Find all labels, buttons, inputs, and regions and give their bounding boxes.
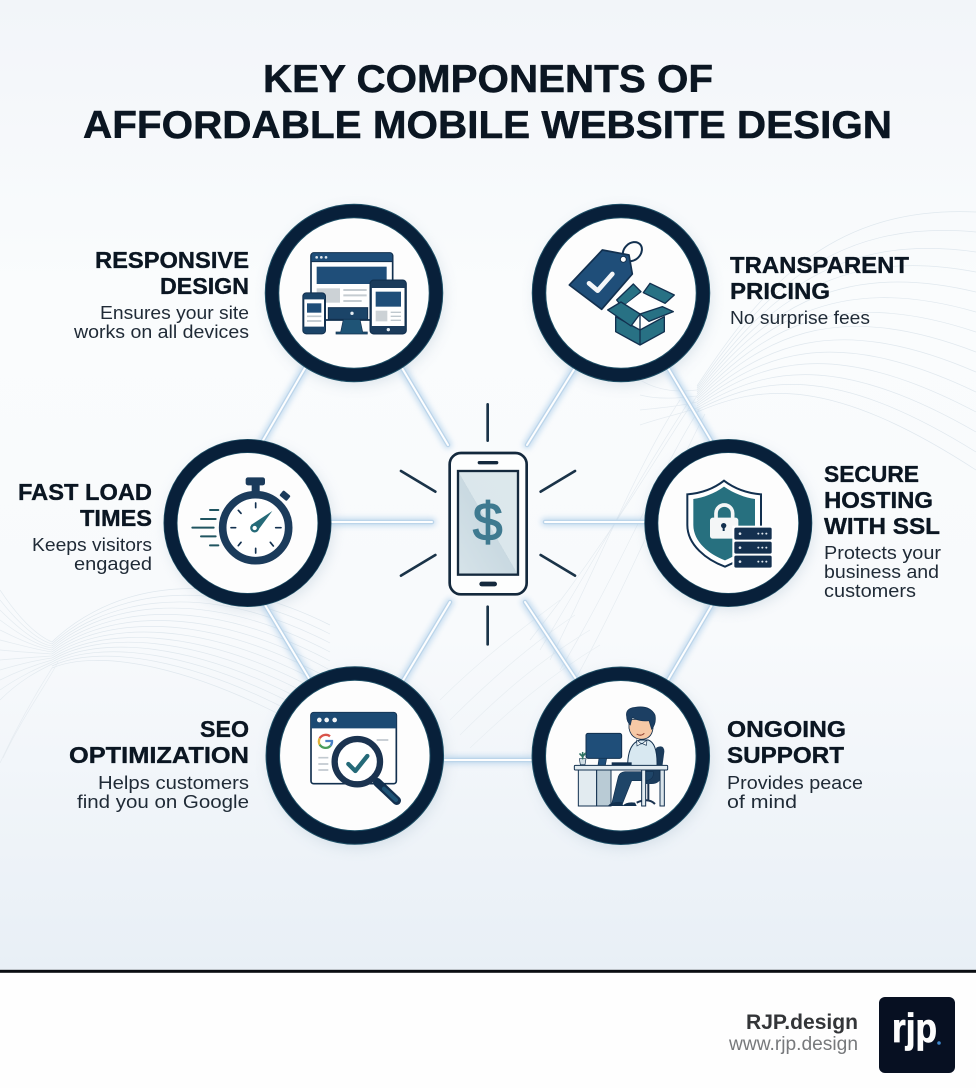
ring <box>539 674 703 838</box>
panel: transparent pricing <box>539 211 910 375</box>
text: transparent pricing <box>730 252 910 328</box>
panel: ongoing support <box>539 674 863 838</box>
text: responsive design: works on all devices <box>73 322 249 342</box>
text: secure hosting with ssl: SECURE <box>824 461 919 487</box>
text: transparent pricing: No surprise fees <box>730 308 870 328</box>
text: seo optimization: SEO <box>200 716 249 742</box>
text: fast load times: TIMES <box>80 505 152 531</box>
logo <box>879 997 955 1073</box>
text: responsive design: Ensures your site <box>100 303 249 323</box>
dollar sign: $ <box>473 494 503 553</box>
ring <box>272 211 436 375</box>
panel: responsive design <box>73 211 436 375</box>
icon: price tag and box <box>569 238 674 345</box>
panel: fast load times <box>18 446 324 600</box>
text: fast load times: Keeps visitors <box>32 535 152 555</box>
text: seo optimization: Helps customers <box>98 773 249 793</box>
title <box>83 58 892 147</box>
brand url: www.rjp.design <box>728 1034 858 1055</box>
panel: secure hosting with ssl <box>651 446 941 601</box>
text: ongoing support: SUPPORT <box>727 742 845 768</box>
text: transparent pricing: TRANSPARENT <box>730 252 910 278</box>
footer bar <box>0 970 976 1088</box>
icon: person at desk <box>574 707 668 806</box>
ring <box>273 674 437 838</box>
logo: rjp <box>892 1005 937 1051</box>
text: secure hosting with ssl <box>824 461 941 601</box>
icon: stopwatch <box>192 477 291 561</box>
text: seo optimization <box>69 716 249 812</box>
text: secure hosting with ssl: customers <box>824 581 916 601</box>
text: secure hosting with ssl: business and <box>824 562 939 582</box>
text: fast load times: FAST LOAD <box>18 479 152 505</box>
phone body <box>450 453 527 594</box>
text: secure hosting with ssl: WITH SSL <box>824 513 940 539</box>
connector network <box>262 368 712 760</box>
text: fast load times: engaged <box>74 554 152 574</box>
ring shadows <box>167 209 813 848</box>
text: secure hosting with ssl: Protects your <box>824 543 941 563</box>
icon: browser and magnifier <box>311 713 397 801</box>
text: responsive design: DESIGN <box>160 273 249 299</box>
brand name: RJP.design <box>746 1010 858 1034</box>
ring <box>170 446 324 600</box>
text: responsive design <box>73 247 249 342</box>
panel: seo optimization <box>69 674 437 838</box>
phone rays <box>401 404 575 644</box>
title: AFFORDABLE MOBILE WEBSITE DESIGN <box>83 104 892 147</box>
title: KEY COMPONENTS OF <box>263 58 713 101</box>
icon: shield, lock and server <box>687 481 773 569</box>
central phone icon <box>401 404 575 644</box>
text: responsive design: RESPONSIVE <box>95 247 249 273</box>
ring <box>651 446 805 600</box>
text: ongoing support: of mind <box>727 792 797 812</box>
text: ongoing support: ONGOING <box>727 716 846 742</box>
text: ongoing support: Provides peace <box>727 773 863 793</box>
text: transparent pricing: PRICING <box>730 278 830 304</box>
text: ongoing support <box>727 716 863 812</box>
text: fast load times <box>18 479 152 574</box>
text: secure hosting with ssl: HOSTING <box>824 487 933 513</box>
text: seo optimization: OPTIMIZATION <box>69 742 249 768</box>
icon: responsive devices <box>303 253 406 334</box>
text: seo optimization: find you on Google <box>77 792 249 812</box>
ring <box>539 211 703 375</box>
